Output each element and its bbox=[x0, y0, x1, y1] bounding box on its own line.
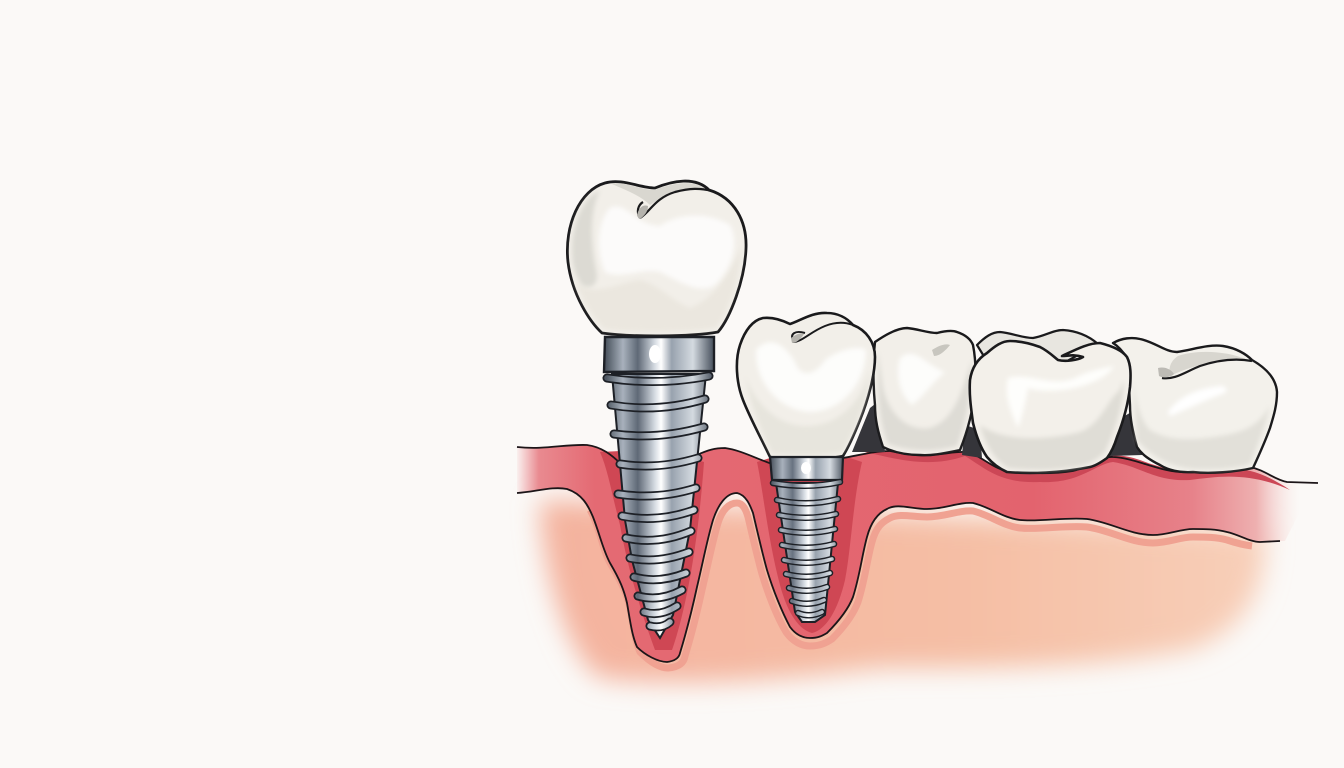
tooth 5 back cusp bbox=[1169, 352, 1248, 376]
large threaded body bbox=[612, 374, 706, 638]
tooth 5 shading bbox=[1133, 380, 1270, 469]
tooth 3 highlight bbox=[898, 354, 945, 405]
gum lower outline bbox=[517, 488, 1280, 662]
small crown highlight bbox=[756, 342, 866, 412]
small threaded body bbox=[776, 483, 838, 622]
darker gum line under teeth bbox=[865, 450, 1290, 490]
large crown highlight bbox=[599, 206, 734, 289]
small abutment bbox=[770, 457, 843, 480]
large crown shading bbox=[575, 245, 742, 332]
bone and soft tissue bbox=[540, 500, 1265, 683]
large crown top cusp bbox=[612, 183, 707, 205]
large implant crown bbox=[567, 181, 746, 336]
small crown shading bbox=[745, 370, 870, 455]
large implant screw bbox=[604, 337, 714, 638]
large abutment bbox=[604, 337, 714, 372]
darker gum around implant 2 bbox=[757, 458, 862, 633]
gum upper outline bbox=[517, 445, 1318, 483]
tooth 5 highlight bbox=[1168, 386, 1226, 416]
tooth 3: centre molar bbox=[874, 328, 976, 455]
tooth 4: front molar bbox=[970, 341, 1131, 473]
tooth 3 shading bbox=[878, 350, 972, 450]
tooth 4 highlight bbox=[1007, 366, 1114, 428]
large crown fissure bbox=[638, 189, 712, 218]
small crown fissure bbox=[792, 323, 853, 342]
darker gum around implant 1 bbox=[600, 450, 704, 650]
small implant crown bbox=[737, 313, 875, 459]
tooth 4 shading bbox=[980, 381, 1124, 470]
tooth 4: back cusp bbox=[977, 330, 1098, 365]
small implant screw bbox=[770, 457, 843, 622]
tooth 5 fissure bbox=[1162, 360, 1252, 378]
gum tissue bbox=[517, 445, 1318, 668]
dark gaps between teeth bbox=[852, 400, 1142, 458]
tooth 5: far right molar bbox=[1113, 338, 1277, 473]
